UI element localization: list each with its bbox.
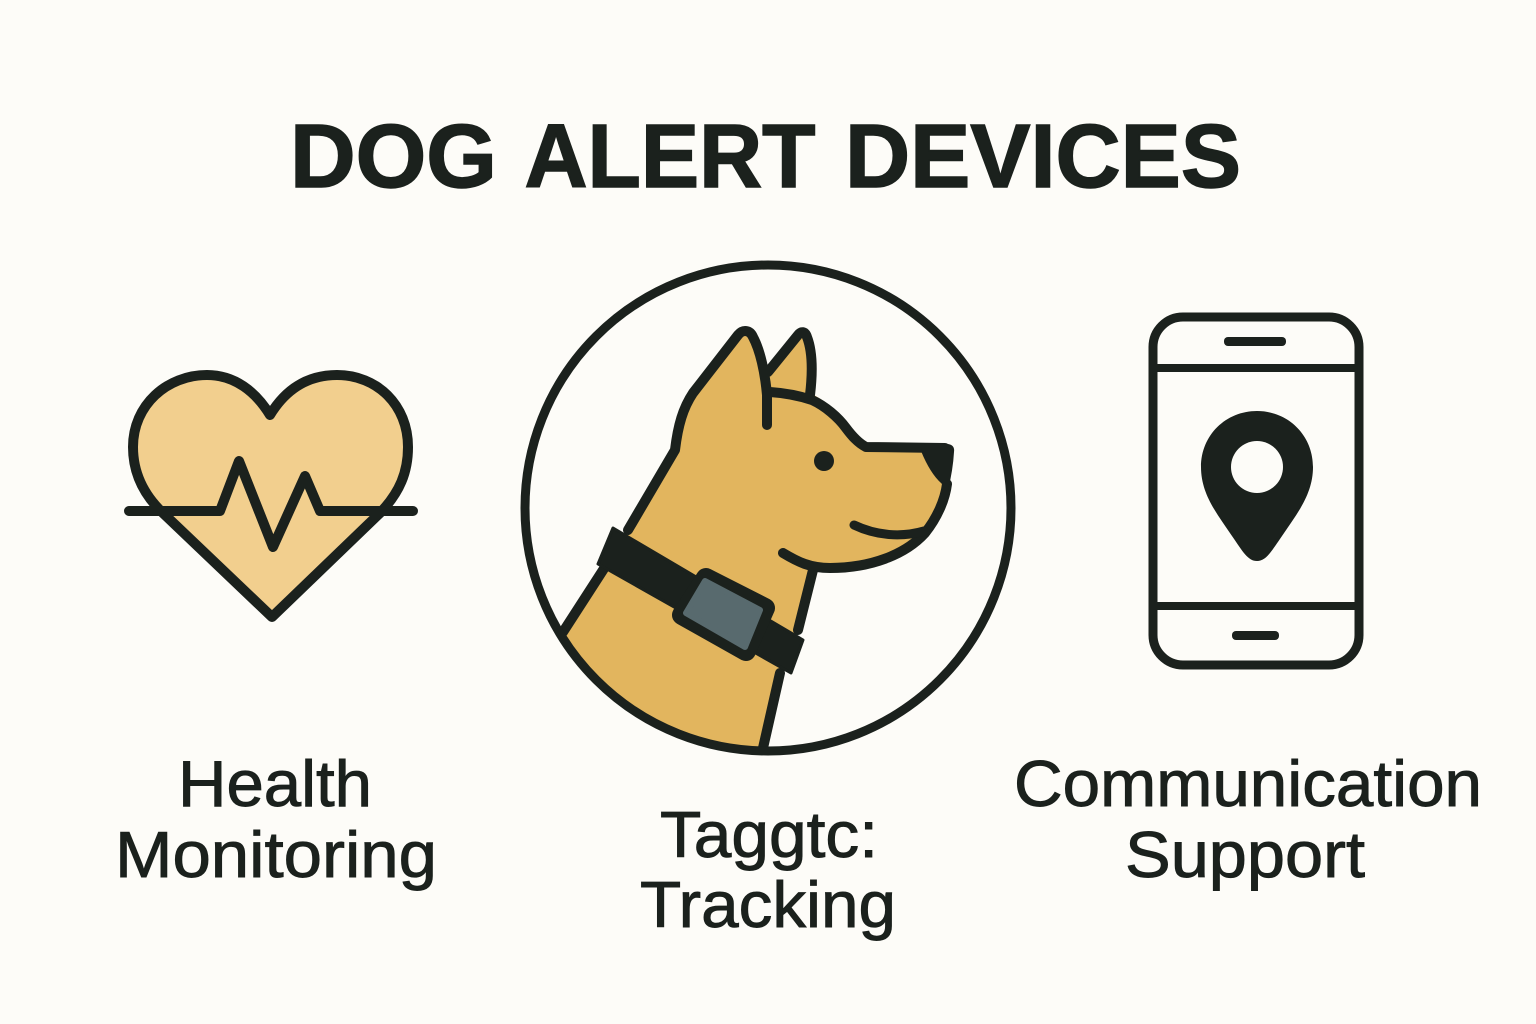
nose [921, 444, 954, 490]
pin hole [1231, 441, 1283, 493]
label: communication support: Support [1125, 818, 1365, 891]
label: tracking: Taggtc: [660, 798, 878, 871]
ring [525, 265, 1011, 751]
speaker [1224, 337, 1286, 346]
dog body [563, 333, 950, 750]
dog outline [563, 331, 947, 748]
location pin [1201, 411, 1313, 561]
label: communication support: Communication [1014, 747, 1482, 820]
home button [1232, 631, 1279, 640]
label: communication support [1014, 747, 1482, 891]
label: tracking [640, 798, 896, 941]
icon: heart with pulse [129, 375, 413, 617]
label: health monitoring: Monitoring [115, 818, 437, 891]
phone body [1153, 317, 1359, 665]
label: health monitoring [115, 747, 437, 891]
screen top line [1153, 364, 1359, 372]
title [290, 107, 1241, 207]
eye [814, 451, 834, 471]
pulse line [129, 461, 413, 547]
label: health monitoring: Health [178, 747, 372, 820]
icon: smartphone with location pin [1153, 317, 1359, 665]
title: DEVICES [845, 107, 1241, 207]
screen bottom line [1153, 602, 1359, 610]
label: tracking: Tracking [640, 868, 896, 941]
mouth [854, 525, 924, 535]
heart shape [133, 375, 408, 617]
title: DOG [290, 107, 497, 207]
collar device [682, 578, 765, 651]
collar strap [598, 528, 803, 673]
title: ALERT [524, 107, 816, 207]
icon: dog in circle with GPS collar [525, 265, 1011, 751]
